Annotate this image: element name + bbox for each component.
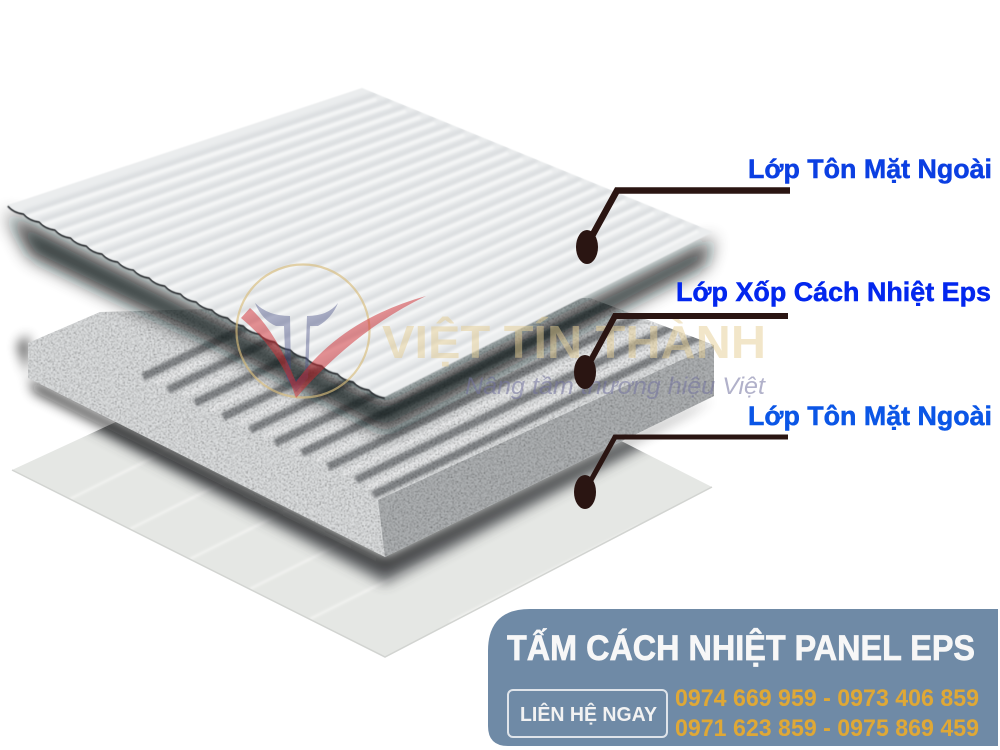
leader line: foam [574, 316, 788, 389]
panel diagram: foam insulation layer [10, 298, 714, 574]
panel diagram: top corrugated sheet layer [6, 88, 713, 432]
foam grooves [140, 298, 702, 500]
shadow under the foam on the bottom sheet [87, 422, 648, 590]
phone numbers line 1: 0974 669 959 - 0973 406 859 [675, 685, 979, 712]
leader line: bottom sheet [574, 437, 788, 509]
bottom sheet front edge [12, 470, 712, 657]
bottom sheet ribs [72, 462, 551, 622]
top sheet surface [8, 88, 713, 397]
banner background [488, 609, 998, 746]
banner title: TẤM CÁCH NHIỆT PANEL EPS [507, 628, 975, 668]
foam front and top faces [28, 298, 714, 557]
button: contact now: LIÊN HỆ NGAY [520, 702, 658, 726]
logo ring [236, 264, 370, 398]
leader line: top sheet [576, 190, 790, 264]
foam right side face [378, 345, 714, 557]
watermark slogan: Nâng tầm thương hiệu Việt [465, 373, 766, 400]
bottom sheet surface [12, 360, 712, 657]
corrugation shading [24, 94, 698, 394]
panel: contact banner [488, 609, 998, 746]
label: bottom sheet: Lớp Tôn Mặt Ngoài [748, 401, 992, 431]
button: contact now [508, 690, 667, 737]
phone numbers line 2: 0971 623 859 - 0975 869 459 [675, 715, 979, 742]
logo letter T [255, 303, 338, 392]
shadow cast by the top sheet [6, 212, 713, 432]
watermark brand name: VIỆT TÍN THÀNH [382, 316, 766, 368]
dark wavy front edge [8, 206, 385, 398]
logo red check mark [241, 296, 426, 398]
watermark logo [236, 264, 766, 400]
label: top sheet: Lớp Tôn Mặt Ngoài [748, 154, 992, 184]
panel diagram: bottom metal sheet layer [12, 422, 712, 658]
foam groove highlights [157, 310, 686, 490]
label: foam: Lớp Xốp Cách Nhiệt Eps [676, 277, 991, 307]
foam drop shadow [18, 335, 714, 568]
foam speckle texture [20, 290, 720, 565]
